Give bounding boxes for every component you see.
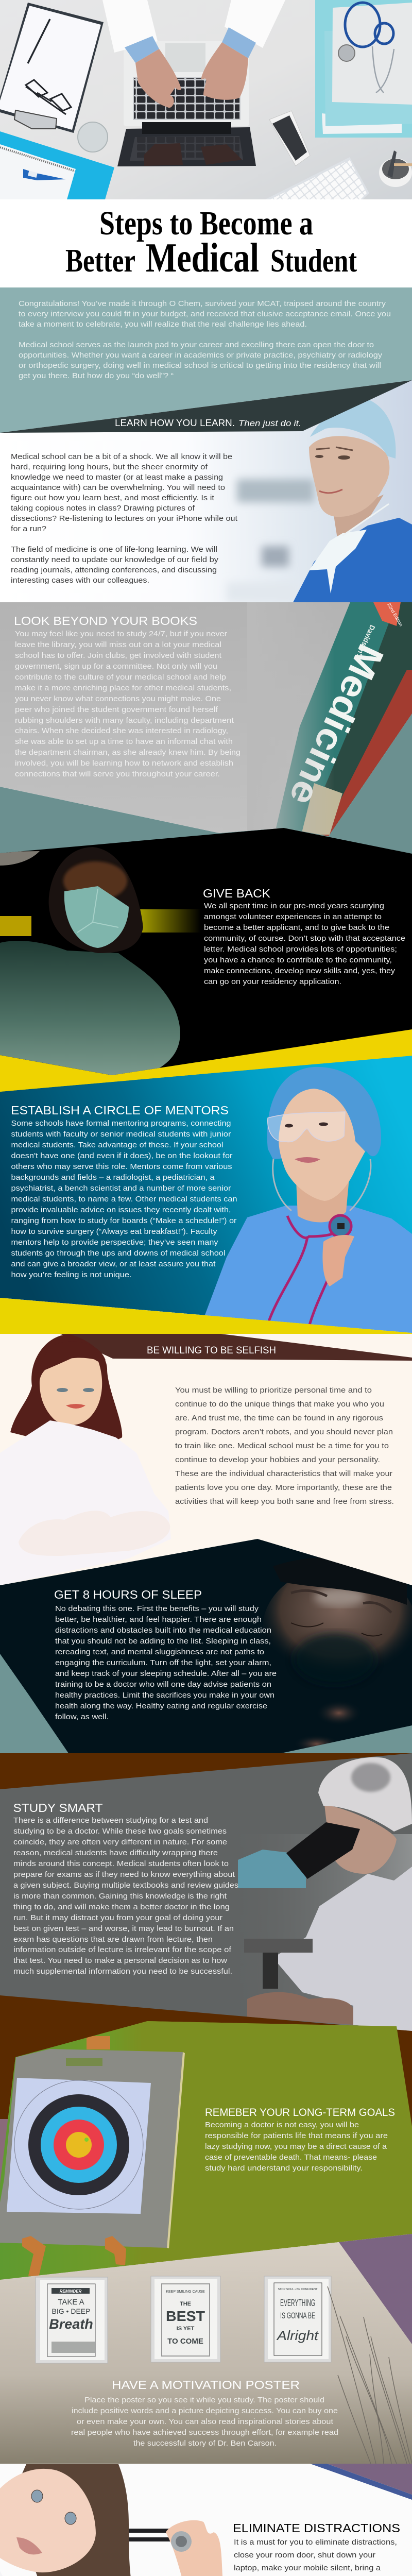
book photo: Davidson's: [354, 624, 377, 660]
notebook with stethoscope: [332, 3, 412, 105]
body: real people who have achieved success through effort, for example read: [71, 2429, 338, 2437]
clipboard: [0, 3, 104, 133]
intro text: or orthopedic surgery, doing well in medical school is critical to getting into the residency that will: [19, 362, 381, 370]
teal background: lower shapes: [0, 714, 412, 855]
body: [13, 1817, 238, 1976]
body: include positive words and a picture depicting success. You can buy one: [72, 2407, 338, 2415]
body: continue to do the unique things that make you who you: [175, 1400, 384, 1409]
body: medical students, to name a few. Other medical students can: [11, 1195, 237, 1204]
photo: woman with crossed arms: [0, 1334, 171, 1585]
intro text: Medical school serves as the launch pad to your career and excelling there can open the door to: [19, 341, 374, 349]
body: distractions and obstacles built into the medical education: [55, 1626, 271, 1635]
body: We all spent time in our pre-med years scurrying: [204, 902, 384, 910]
panel: study smart: [0, 1753, 412, 2032]
panel: motivation poster: [0, 2241, 412, 2464]
body: can go on your residency application.: [204, 978, 341, 986]
body: the department chairman, as she already knew him. By being: [15, 749, 241, 757]
body: students go through the ups and downs of medical school: [11, 1249, 226, 1258]
body: or even make your own. You can also read inspirational stories about: [77, 2418, 333, 2426]
body: [55, 1605, 277, 1721]
body: to train like one. Medical school must be a time for you to: [175, 1442, 389, 1450]
text: learn how you learn body: reading journals, attending conferences, and discussing: [11, 566, 217, 574]
body: thing to do, and will make them a better doctor in the long: [13, 1903, 230, 1911]
poster frame 1: [36, 2277, 108, 2363]
poster frame 2: IS YET: [177, 2326, 195, 2332]
heading: REMEBER YOUR LONG-TERM GOALS: [205, 2107, 395, 2119]
water glass: [78, 122, 108, 152]
photo: woman with stethoscope: [0, 2464, 412, 2576]
body: school has to offer. Join clubs, get involved with student: [15, 652, 221, 660]
doctor sleeves and hands: [102, 0, 285, 108]
teal background: sleep corners: [0, 1585, 412, 1753]
panel: be willing to be selfish: [0, 1334, 412, 1586]
body: psychiatrist, a bench scientist and a number of more senior: [11, 1184, 231, 1193]
photo: archery target: [0, 2036, 185, 2277]
body: is more than common. Gaining this knowledge is the right: [13, 1892, 227, 1901]
heading: ESTABLISH A CIRCLE OF MENTORS: [11, 1104, 229, 1117]
body: Place the poster so you see it while you study. The poster should: [84, 2396, 324, 2404]
body: coincide, they are often very different in nature. For some: [13, 1838, 227, 1846]
body: make connections, develop new skills and, yes, they: [204, 967, 396, 975]
poster frame 1: BIG • DEEP: [52, 2307, 90, 2315]
poster frame 2: [151, 2276, 220, 2362]
body: exam has questions that are drawn from lecture, then: [13, 1936, 213, 1944]
text: learn how you learn body: knowledge we need to master (or at least make a passing: [11, 473, 223, 482]
text: learn how you learn body: for a run?: [11, 525, 46, 533]
body: reason, medical students have difficulty wrapping there: [13, 1849, 218, 1857]
heading: ELIMINATE DISTRACTIONS: [233, 2521, 400, 2535]
body: You may feel like you need to study 24/7, but if you never: [15, 630, 227, 638]
body: best on given test – and worse, it may lead to burnout. If an: [13, 1925, 234, 1933]
panel: look beyond your books: [0, 602, 412, 839]
title line 2: Better: [65, 242, 135, 279]
body: government, sign up for a committee. Not only will you: [15, 663, 217, 671]
banner: learn how you learn: Then just do it.: [238, 418, 301, 428]
heading: GET 8 HOURS OF SLEEP: [54, 1588, 202, 1601]
body: studying to be a doctor. While these two goals sometimes: [13, 1827, 227, 1836]
body: [234, 2538, 397, 2576]
nurse figure: [203, 1067, 412, 1340]
photo: masked surgeon: [0, 847, 201, 1075]
body: students with faculty or senior medical students with junior: [11, 1130, 231, 1139]
text: learn how you learn body: acquaintance with) can be overwhelming. You will need to: [11, 484, 225, 492]
text: learn how you learn body: constantly need to update our knowledge of our field by: [11, 556, 219, 564]
body: doesn't have one (and even if it does), be on the lookout for: [11, 1152, 233, 1160]
text: give back: [203, 887, 405, 986]
body: case of preventable death. That means- please: [205, 2154, 377, 2162]
body: responsible for patients life that means if you are: [205, 2132, 388, 2140]
body: and keep track of your sleeping schedule. After all – you are: [55, 1670, 277, 1678]
banner: learn how you learn: [0, 380, 412, 433]
poster frame 2: TO COME: [167, 2337, 203, 2346]
body: continue to develop your hobbies and your personality.: [175, 1456, 380, 1464]
text: study smart: [13, 1801, 238, 1976]
panel: get 8 hours of sleep: [0, 1535, 412, 1757]
body: how you’re feeling is not unique.: [11, 1271, 132, 1279]
body: information outside of lecture is irrelevant for the scope of: [13, 1946, 232, 1954]
heading: BE WILLING TO BE SELFISH: [147, 1345, 276, 1356]
body: No debating this one. First the benefits – you will study: [55, 1605, 259, 1613]
body: healthy practices. Limit the sacrifices you make in your own: [55, 1691, 274, 1700]
body: It is a must for you to eliminate distractions,: [234, 2538, 397, 2547]
poster frame 3: STOP SOUL • BE CONFIDENT: [278, 2288, 318, 2291]
body: medical students. Take advantage of these. If your school: [11, 1141, 223, 1149]
body: Becoming a doctor is not easy, you will be: [205, 2121, 359, 2129]
body: leave the library, you will miss out on a lot your medical: [15, 641, 221, 649]
intro text: get you there. But how do you “do well”? “: [19, 372, 174, 380]
banner ribbon: [60, 1334, 412, 1361]
body: that test. You need to make a personal decision as to how: [13, 1957, 228, 1965]
body: [175, 1386, 394, 1506]
body: [71, 2396, 338, 2448]
brown background: [0, 1753, 412, 2119]
book photo: 22nd Edition: [386, 602, 404, 627]
body: program. Doctors aren’t robots, and you should never plan: [175, 1428, 393, 1436]
pen cup: [379, 150, 412, 187]
heading: HAVE A MOTIVATION POSTER: [112, 2378, 300, 2392]
poster frame 1: REMINDER: [60, 2289, 82, 2294]
intro text: opportunities. Whether you want a career in academics or private practice, psychiatry or radiology: [19, 351, 383, 360]
body: follow, as well.: [55, 1713, 109, 1721]
body: [205, 2121, 388, 2173]
body: and can give a broader view, or at least assure you that: [11, 1260, 215, 1268]
intro text: take a moment to celebrate, you will realize that the real challenge lies ahead.: [19, 320, 307, 329]
body: [204, 902, 405, 986]
body: mentors help to provide perspective; they’ve seen many: [11, 1239, 218, 1247]
title line 2: [65, 235, 357, 281]
plant: [328, 2286, 412, 2464]
body: prepare for exams as if they need to know everything about: [13, 1871, 235, 1879]
body: amongst volunteer experiences in an attempt to: [204, 913, 382, 921]
yellow band: lower: [0, 1298, 412, 1334]
body: rubbing shoulders with many faculty, including department: [15, 717, 234, 725]
body: involved, you will be learning how to network and establish: [15, 759, 233, 768]
title line 2: Student: [270, 242, 357, 279]
photo: scientist at microscope: [238, 1757, 412, 2032]
body: activities that will keep you both sane and free from stress.: [175, 1498, 394, 1506]
poster frame 3: IS GONNA BE: [280, 2311, 315, 2320]
body: [11, 1120, 237, 1279]
body: contribute to the culture of your medical school and help: [15, 673, 226, 682]
body: a given subject. Buying multiple textbooks and review guides: [13, 1882, 238, 1890]
title line 1: Steps to Become a: [99, 205, 313, 242]
text: learn how you learn body: Medical school can be a bit of a shock. We all know it will be: [11, 453, 232, 461]
panel: intro: [0, 287, 412, 433]
body: [15, 630, 241, 778]
poster frame 1: TAKE A: [58, 2298, 84, 2307]
body: lazy studying now, you may be a direct cause of a: [205, 2143, 387, 2151]
body: better, be healthier, and feel happier. There are enough: [55, 1616, 262, 1624]
heading: GIVE BACK: [203, 887, 271, 900]
body: peer who joined the student government found herself: [15, 706, 218, 714]
text: learn how you learn body: dissections? Re-listening to lectures on your iPhone while out: [11, 515, 237, 523]
body: others who may serve this role. Mentors come from various: [11, 1163, 232, 1171]
body: These are the individual characteristics that will make your: [175, 1470, 392, 1478]
body: There is a difference between studying for a test and: [13, 1817, 208, 1825]
body: rereading text, and mental sluggishness are not paths to: [55, 1648, 264, 1656]
panel: learn how you learn photo background: [0, 380, 412, 602]
body: ranging from how to study for boards (“Make a schedule!”) or: [11, 1217, 237, 1225]
panel: establish a circle of mentors: [0, 1056, 412, 1340]
notebook and thermometer: [0, 144, 76, 199]
yellow background band: [0, 1025, 412, 1095]
mauve background: [0, 2119, 21, 2282]
body: engaging the curriculum. Turn off the light, set your alarm,: [55, 1659, 271, 1667]
poster frame 1: Breath: [49, 2316, 93, 2332]
intro text: [19, 300, 391, 380]
body: chairs. When she decided she was interested in radiology,: [15, 727, 228, 735]
body: connections that will serve you throughout your career.: [15, 770, 220, 778]
title line 2: Medical: [146, 235, 259, 281]
white keyboard: [265, 157, 369, 199]
body: close your room door, shut down your: [234, 2551, 375, 2560]
laptop: [117, 41, 256, 166]
panel: give back: [0, 824, 412, 1082]
body: Some schools have formal mentoring programs, connecting: [11, 1120, 231, 1128]
phone: [269, 111, 310, 166]
text: get 8 hours of sleep: [54, 1588, 277, 1721]
body: you have a chance to contribute to the community,: [204, 956, 392, 964]
body: she was able to set up a time to have an informal chat with: [15, 738, 233, 746]
text: learn how you learn body: hard, requiring long hours, but the sheer enormity of: [11, 463, 208, 471]
body: training to be a doctor who will one day advise patients on: [55, 1681, 271, 1689]
text: learn how you learn body: [11, 453, 237, 585]
title: [65, 205, 357, 281]
body: provide invaluable advice on issues they recently dealt with,: [11, 1206, 231, 1214]
corner stripe: [310, 2464, 412, 2500]
body: study hard understand your responsibility.: [205, 2164, 363, 2173]
blue folder: [0, 131, 114, 199]
body: make it a more enriching place for other medical students,: [15, 684, 231, 692]
photo: sleeping face: [263, 1557, 412, 1753]
body: patients love you one day. More importantly, these are the: [175, 1484, 392, 1492]
text: learn how you learn body: The field of medicine is one of life-long learning. We will: [11, 546, 217, 554]
book photo: [247, 602, 412, 839]
body: how to survive surgery (“Always eat breakfast!”). Faculty: [11, 1228, 217, 1236]
text: learn how you learn body: figure out how you learn best, and most efficiently. Is it: [11, 494, 214, 502]
body: that you should not be adding to the list. Sleeping in class,: [55, 1637, 271, 1646]
poster frame 2: THE: [180, 2301, 191, 2307]
heading: STUDY SMART: [13, 1801, 103, 1815]
book photo: Medicine: [281, 638, 391, 812]
intro text: to every interview you could fit in your budget, and received that elusive acceptance email. Once you: [19, 310, 391, 318]
body: become a better applicant, and to give back to the: [204, 924, 389, 932]
panel: eliminate distractions: [0, 2464, 412, 2576]
body: are. And trust me, the time can be found in any rigorous: [175, 1414, 383, 1422]
intro text: Congratulations! You’ve made it through O Chem, survived your MCAT, traipsed around the country: [19, 300, 386, 308]
poster frame 3: EVERYTHING: [280, 2298, 315, 2308]
banner: learn how you learn: LEARN HOW YOU LEARN.: [115, 418, 235, 428]
panel: long-term goals: [0, 2020, 412, 2282]
text: motivation poster: [71, 2378, 338, 2448]
body: You must be willing to prioritize personal time and to: [175, 1386, 372, 1395]
body: letter. Medical school provides lots of opportunities;: [204, 945, 397, 954]
body: run. But it may distract you from your goal of doing your: [13, 1914, 222, 1922]
hero photo: doctor at desk: [0, 0, 412, 199]
body: the successful story of Dr. Ben Carson.: [133, 2439, 277, 2448]
text: learn how you learn body: interesting cases with our colleagues.: [11, 577, 149, 585]
poster frame 2: BEST: [166, 2308, 205, 2324]
body: much supplemental information you need to be successful.: [13, 1968, 232, 1976]
body: health along the way. Healthy eating and regular exercise: [55, 1702, 267, 1710]
text: long-term goals: [205, 2107, 395, 2173]
poster frame 3: [264, 2276, 331, 2362]
poster frame 2: KEEP SMILING CAUSE: [166, 2290, 205, 2294]
body: you never know what connections you might make. One: [15, 695, 221, 703]
body: minds around this concept. Medical students often look to: [13, 1860, 229, 1868]
heading: LOOK BEYOND YOUR BOOKS: [14, 614, 197, 628]
poster frame 3: Alright: [276, 2328, 319, 2343]
text: look beyond your books: [14, 614, 241, 778]
text: establish a circle of mentors: [11, 1104, 237, 1279]
purple background: [339, 2234, 412, 2464]
text: learn how you learn body: taking copious notes in class? Drawing pictures of: [11, 504, 195, 513]
teal folders: [315, 0, 412, 138]
body: laptop, make your mobile silent, bring a: [234, 2564, 381, 2572]
body: community, of course. Don’t stop with that acceptance: [204, 935, 405, 943]
body: backgrounds and fields – a radiologist, a pediatrician, a: [11, 1174, 215, 1182]
surgeon figure: [293, 399, 412, 602]
